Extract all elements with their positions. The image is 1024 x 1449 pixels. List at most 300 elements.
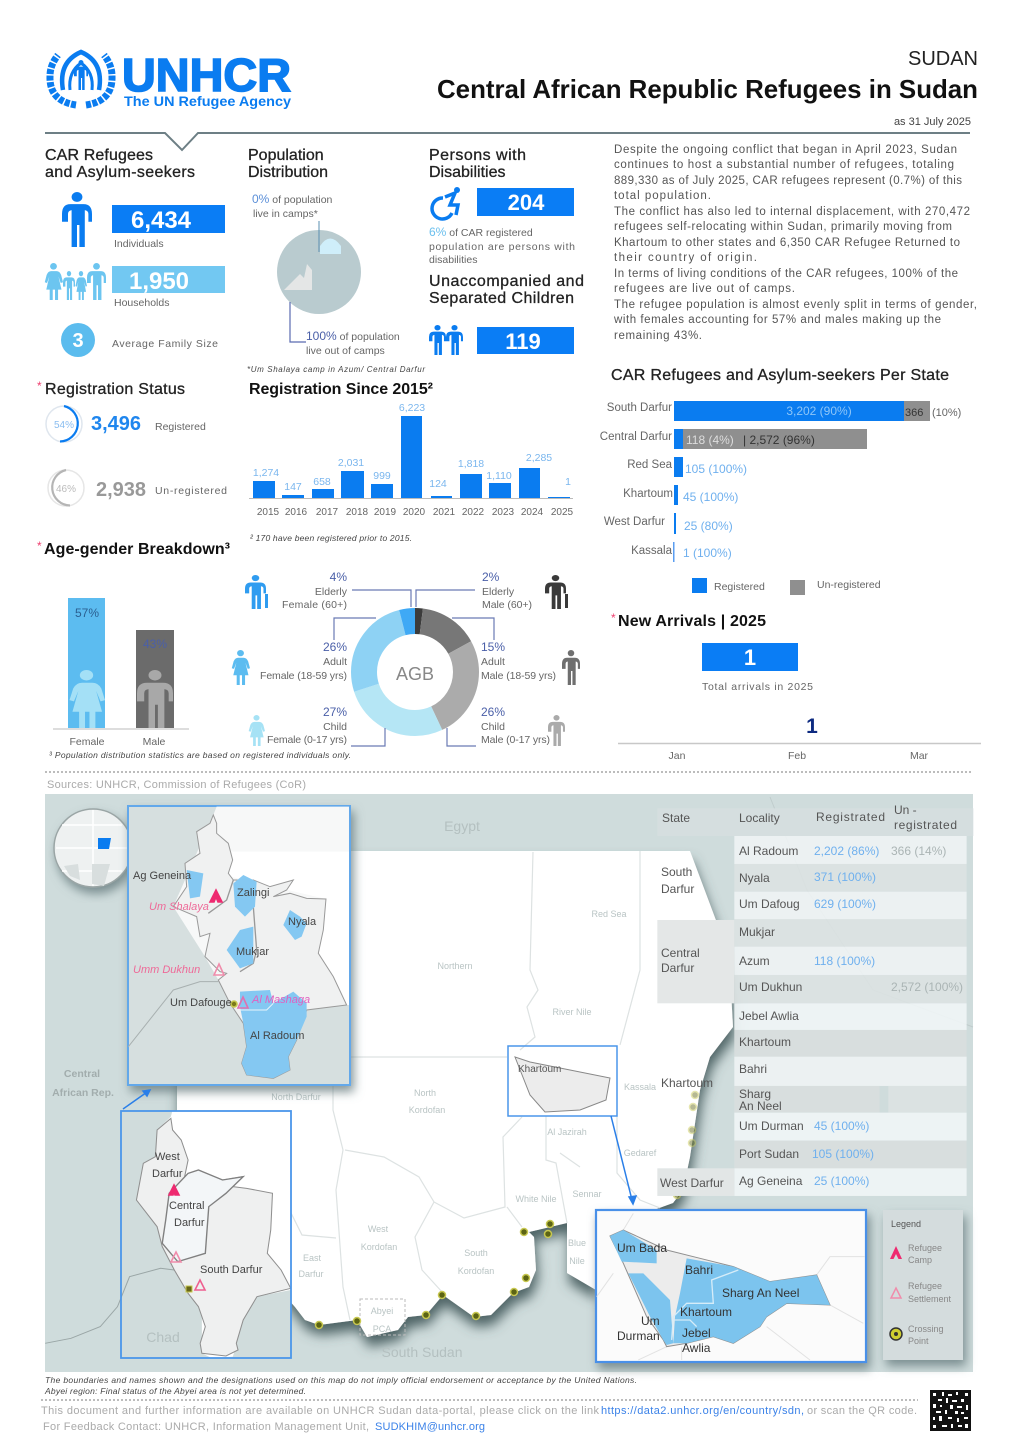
table header <box>662 803 957 832</box>
labels: female: 4% <box>330 570 347 584</box>
arrow: to Darfur inset <box>123 1090 150 1109</box>
state labels <box>600 402 673 557</box>
unregistered column: 2,572 (100%) <box>891 980 963 994</box>
table rows <box>657 808 973 1196</box>
bar values: 1,274 <box>253 467 279 479</box>
legend: refugee camp: Camp <box>908 1255 932 1265</box>
bar values: 25 (80%) <box>684 519 733 533</box>
labels: Central <box>169 1200 204 1212</box>
labels: female: Female (18-59 yrs) <box>260 670 347 682</box>
bars <box>253 416 570 498</box>
map panel <box>45 794 973 1372</box>
sources: Sources: UNHCR, Commission of Refugees (CoR) <box>47 779 306 791</box>
heading: New Arrivals | 2025 <box>618 613 766 630</box>
labels: Sharg An Neel <box>722 1286 799 1300</box>
neighbouring country label: African Rep. <box>52 1087 114 1099</box>
panel: age-gender breakdown <box>37 539 580 760</box>
bar values: 1 <box>565 476 571 488</box>
frame <box>121 1111 291 1358</box>
monthly chart <box>618 715 981 762</box>
country and state labels: North Darfur <box>271 1092 321 1102</box>
total label: Total arrivals in 2025 <box>702 681 813 693</box>
bar values: 1,110 <box>486 470 512 482</box>
legend: refugee settlement <box>891 1281 952 1304</box>
country and state labels: Egypt <box>444 818 480 834</box>
bar values: 118 (4%) <box>686 433 734 447</box>
bar values: | 2,572 (96%) <box>743 433 815 447</box>
labels: female: Female (60+) <box>282 599 347 611</box>
total arrivals stat: 1 <box>744 645 756 670</box>
year axis: 2024 <box>521 507 544 518</box>
year axis: 2015 <box>257 507 280 518</box>
stacked bars <box>673 401 930 562</box>
country and state labels: Sennar <box>572 1189 602 1199</box>
stat: 204 <box>477 188 574 216</box>
panel: registration status <box>37 379 227 506</box>
monthly chart: Jan <box>669 750 686 762</box>
panel: new arrivals <box>611 611 981 762</box>
text block: summary: Despite the ongoing conflict that began in April 2023, Sudan <box>614 144 957 156</box>
country and state labels: South <box>464 1248 488 1258</box>
map disclaimer: The boundaries and names shown and the designations used on this map do not imply official endorsement or acceptance by the United Nations. <box>45 1375 637 1385</box>
state labels: South Darfur <box>607 402 672 414</box>
year axis: 2019 <box>374 507 397 518</box>
out of camps label: of population <box>337 331 400 343</box>
registered column: 105 (100%) <box>812 1147 874 1161</box>
year axis: 2025 <box>551 507 574 518</box>
bar: male <box>136 630 174 728</box>
labels: female <box>260 570 348 746</box>
registered column: 2,202 (86%) <box>814 844 879 858</box>
text block: summary: remaining 43%. <box>614 330 702 342</box>
bar values: 366 <box>905 407 923 419</box>
monthly chart: Feb <box>788 750 806 762</box>
labels: Um <box>641 1314 660 1328</box>
locality column: Um Dafoug <box>739 897 800 911</box>
stat: 119: 119 <box>505 329 541 354</box>
heading: * <box>37 379 42 393</box>
text block: summary: continues to host a substantial number of refugees, totaling <box>614 159 954 171</box>
unregistered count: 2,938 <box>96 479 146 501</box>
heading: and Asylum-seekers <box>45 164 195 181</box>
bar values: (10%) <box>932 407 961 419</box>
labels: Durman <box>617 1329 660 1343</box>
labels: female: 26% <box>323 640 347 654</box>
country and state labels: Kassala <box>624 1082 656 1092</box>
state column: South <box>661 865 692 879</box>
text block: summary: The refugee population is almost evenly split in terms of gender, <box>614 299 977 311</box>
year axis: 2020 <box>403 507 426 518</box>
legend: Un-registered <box>817 579 881 591</box>
state labels: Kassala <box>631 545 673 557</box>
labels: male <box>481 570 556 746</box>
logo wordmark: UNHCR <box>122 49 291 101</box>
QR code <box>930 1390 971 1431</box>
individuals stat <box>112 205 225 250</box>
year axis: 2023 <box>492 507 515 518</box>
disabilities text: disabilities <box>429 254 477 266</box>
state labels: Red Sea <box>627 459 673 471</box>
Abyei PCA box <box>360 1299 405 1335</box>
labels: male: Elderly <box>482 586 515 598</box>
state labels: West Darfur <box>604 516 665 528</box>
legend: crossing point: Point <box>908 1336 929 1346</box>
unregistered percent: 46% <box>56 484 76 495</box>
inset shapes <box>128 807 349 1078</box>
disabilities text: population are persons with <box>429 241 575 253</box>
footnote: *Um Shalaya camp in Azum/ Central Darfur <box>247 365 425 374</box>
donut centre label: AGB <box>396 664 434 684</box>
text block: summary: 889,330 as of July 2025, CAR refugees represent (0.7%) of this <box>614 175 962 187</box>
bar values: 147 <box>284 481 302 493</box>
state labels: Khartoum <box>623 488 673 500</box>
table header: State <box>662 811 690 825</box>
households stat: 1,950 <box>129 268 189 295</box>
text block: summary: refugees are live out of camps. <box>614 283 795 295</box>
camp and settlement markers <box>210 890 248 1008</box>
logo: UNHCR <box>50 49 291 109</box>
registered column: 25 (100%) <box>814 1174 869 1188</box>
inset labels: Al Radoum <box>250 1030 304 1042</box>
stat: 119 <box>477 327 574 354</box>
bar values: 999 <box>373 470 391 482</box>
text block: summary: with females accounting for 57% and males making up the <box>613 314 941 326</box>
individuals stat: Individuals <box>114 238 164 250</box>
locality column: Sharg <box>739 1087 771 1101</box>
labels: male: 26% <box>481 705 505 719</box>
country and state labels: Kordofan <box>361 1242 397 1252</box>
state column: Darfur <box>661 882 694 896</box>
inset locator: Khartoum: Khartoum <box>518 1064 561 1075</box>
country and state labels: West <box>368 1224 389 1234</box>
bar values: 1 (100%) <box>683 546 732 560</box>
labels: Awlia <box>682 1341 711 1355</box>
year axis: 2022 <box>462 507 485 518</box>
panel: refugees per state <box>600 367 961 595</box>
icon: wheelchair <box>432 187 460 219</box>
locality column: Khartoum <box>739 1035 791 1049</box>
labels: female: Child <box>323 721 347 733</box>
panel: population distribution <box>247 147 425 374</box>
bar: female <box>68 598 105 728</box>
footer text: For Feedback Contact: UNHCR, Information Management Unit, <box>43 1421 369 1433</box>
labels: male: 15% <box>481 640 505 654</box>
heading: Disabilities <box>429 164 505 181</box>
inset map: Darfur states <box>45 1110 291 1358</box>
bar: female: 57% <box>75 606 99 620</box>
country and state labels: Al Jazirah <box>547 1127 587 1137</box>
country and state labels: South Sudan <box>382 1344 462 1360</box>
monthly chart: 1 <box>806 715 818 738</box>
header rule with notch <box>45 133 970 150</box>
bar values: 124 <box>429 478 447 490</box>
labels: Bahri <box>685 1263 713 1277</box>
Sudan territory <box>177 851 733 1337</box>
registered percent: 54% <box>54 420 74 431</box>
state column: Khartoum <box>661 1076 713 1090</box>
text block: summary: Khartoum to other states and 6,350 CAR Refugee Returned to <box>614 237 960 249</box>
labels: female: Female (0-17 yrs) <box>267 734 347 746</box>
locality column: Mukjar <box>739 925 775 939</box>
registered ring <box>46 406 82 442</box>
bar values: 658 <box>313 476 331 488</box>
panel: CAR refugees and asylum-seekers <box>45 147 225 357</box>
labels: Darfur <box>152 1168 183 1180</box>
locality column: Azum <box>739 954 770 968</box>
heading: unaccompanied: Separated Children <box>429 290 574 307</box>
footer text: SUDKHIM@unhcr.org <box>375 1421 485 1433</box>
legend: crossing point: Crossing <box>908 1324 944 1334</box>
legend: refugee camp: Refugee <box>908 1243 942 1253</box>
in camps label: live in camps* <box>253 208 318 220</box>
footer text <box>41 1405 917 1433</box>
map legend <box>883 1210 963 1360</box>
country and state labels: North <box>414 1088 436 1098</box>
year axis: 2017 <box>316 507 339 518</box>
labels: male: Child <box>481 721 505 733</box>
footnote: ³ Population distribution statistics are based on registered individuals only. <box>49 750 351 760</box>
locality column: Nyala <box>739 871 770 885</box>
inset frame <box>128 806 350 1085</box>
inset labels: Um Dafouge <box>170 997 232 1009</box>
bar values <box>683 404 961 560</box>
bar values: 6,223 <box>399 402 425 414</box>
heading: Distribution <box>248 164 328 181</box>
table header: Un - <box>894 803 917 817</box>
registered column <box>812 844 879 1188</box>
heading: * <box>37 539 42 553</box>
text block: summary: In terms of living conditions of the CAR refugees, 100% of the <box>614 268 958 280</box>
country and state labels: East <box>303 1253 322 1263</box>
heading: Registration Since 2015² <box>249 381 433 398</box>
icon: children <box>429 325 463 355</box>
country name: SUDAN <box>908 48 978 70</box>
labels: male: 2% <box>482 570 500 584</box>
map disclaimer: Abyei region: Final status of the Abyei area is not yet determined. <box>44 1386 306 1396</box>
labels: Jebel <box>682 1326 711 1340</box>
country and state labels: Kordofan <box>458 1266 494 1276</box>
year axis: 2018 <box>346 507 369 518</box>
bar values <box>253 402 571 493</box>
state column: West Darfur <box>660 1176 724 1190</box>
labels: female: 27% <box>323 705 347 719</box>
panel: persons with disabilities <box>429 147 584 355</box>
footer text: or scan the QR code. <box>807 1405 917 1417</box>
frame <box>596 1210 866 1362</box>
footer text: This document and further information are available on UNHCR Sudan data-portal, please click on the link <box>41 1405 600 1417</box>
inset labels: Umm Dukhun <box>133 964 200 976</box>
icon: mountains <box>284 264 312 290</box>
state labels: Central Darfur <box>600 431 672 443</box>
country and state labels: Blue <box>568 1238 586 1248</box>
unregistered column <box>891 844 963 994</box>
state column <box>660 865 724 1190</box>
text block: summary: total population. <box>614 190 711 202</box>
labels: male: Male (60+) <box>482 599 532 611</box>
title block <box>437 48 978 128</box>
locality column: Bahri <box>739 1062 767 1076</box>
heading: Registration Status <box>45 381 185 398</box>
labels: male: Male (18-59 yrs) <box>481 670 556 682</box>
bar values: 2,285 <box>526 452 552 464</box>
country and state labels: Nile <box>569 1256 585 1266</box>
locality column <box>739 844 804 1188</box>
inset labels: Nyala <box>288 916 317 928</box>
labels: female: Adult <box>323 656 347 668</box>
labels: West <box>155 1151 180 1163</box>
country and state labels: Abyei <box>371 1306 393 1316</box>
heading: Population <box>248 147 324 164</box>
bar values: 2,031 <box>338 457 364 469</box>
inset labels: Mukjar <box>236 946 269 958</box>
arrow: to Khartoum inset <box>611 1116 636 1204</box>
labels: Darfur <box>174 1217 205 1229</box>
footer text: https://data2.unhcr.org/en/country/sdn, <box>601 1405 804 1417</box>
locality column: Al Radoum <box>739 844 798 858</box>
inset map: Khartoum localities <box>596 1210 866 1362</box>
unregistered ring <box>48 470 84 506</box>
legend <box>692 578 881 595</box>
locality column: Ag Geneina <box>739 1174 803 1188</box>
labels: Um Bada <box>617 1241 667 1255</box>
bar labels: Male <box>143 736 166 748</box>
heading: unaccompanied: Unaccompanied and <box>429 273 584 290</box>
legend: refugee camp <box>890 1243 942 1265</box>
registered column: 118 (100%) <box>814 954 875 968</box>
disabilities text: 6% <box>429 225 447 239</box>
labels: Khartoum <box>680 1305 732 1319</box>
logo tagline: The UN Refugee Agency <box>124 93 291 109</box>
connectors <box>334 590 494 746</box>
footnote: ² 170 have been registered prior to 2015. <box>250 533 412 543</box>
neighbouring country label: Central <box>64 1068 100 1080</box>
labels: male: Adult <box>481 656 505 668</box>
map background <box>45 794 973 1372</box>
icon: tent <box>320 238 341 254</box>
inset labels: Ag Geneina <box>133 870 192 882</box>
table header: Registrated <box>816 810 885 824</box>
pie chart <box>277 221 361 314</box>
bar chart: registration since 2015 <box>249 381 574 543</box>
locator globe <box>54 809 132 887</box>
locality column: Um Dukhun <box>739 980 802 994</box>
country and state labels: Northern <box>437 961 473 971</box>
country and state labels: PCA <box>373 1324 391 1334</box>
text block: summary: their country of origin. <box>614 252 757 264</box>
country and state labels: White Nile <box>515 1194 557 1204</box>
year axis: 2016 <box>285 507 308 518</box>
out of camps connector <box>290 302 306 342</box>
stat: 204: 204 <box>508 190 545 215</box>
heading: * <box>611 611 616 625</box>
inset labels: Al Mashaga <box>251 994 310 1006</box>
title: Central African Republic Refugees in Sudan <box>437 74 978 104</box>
average family size <box>61 323 218 357</box>
data table <box>657 803 973 1196</box>
registered column: 371 (100%) <box>814 870 876 884</box>
individuals stat: 6,434 <box>131 207 192 234</box>
total arrivals stat <box>702 643 798 671</box>
crossing points <box>316 1092 698 1328</box>
heading: Persons with <box>429 147 526 164</box>
registered column: 629 (100%) <box>814 897 876 911</box>
table header: registrated <box>894 818 957 832</box>
labels: male: Male (0-17 yrs) <box>481 734 550 746</box>
locality column: An Neel <box>739 1099 782 1113</box>
households stat <box>112 266 225 309</box>
country and state labels: Red Sea <box>591 909 627 919</box>
country and state labels <box>271 818 657 1360</box>
legend: crossing point <box>890 1324 944 1346</box>
heading: CAR Refugees <box>45 147 153 164</box>
text block: summary: The conflict has also led to internal displacement, with 270,472 <box>614 206 970 218</box>
icon: UNHCR emblem <box>50 52 112 105</box>
date: as 31 July 2025 <box>894 116 971 128</box>
bar values: 45 (100%) <box>683 490 738 504</box>
inset labels: Um Shalaya <box>149 901 209 913</box>
disabilities text: of CAR registered <box>446 227 533 239</box>
bar values: 3,202 (90%) <box>786 404 852 418</box>
inset map: Darfur localities <box>128 806 350 1085</box>
unregistered column: 366 (14%) <box>891 844 946 858</box>
heading: Age-gender Breakdown³ <box>44 541 230 558</box>
label: Chad: Chad <box>146 1329 180 1345</box>
registered column: 45 (100%) <box>814 1119 869 1133</box>
registered label: Registered <box>155 421 206 433</box>
registered count: 3,496 <box>91 413 141 435</box>
out of camps label: live out of camps <box>306 345 385 357</box>
locality column: Um Durman <box>739 1119 804 1133</box>
legend: refugee settlement: Refugee <box>908 1281 942 1291</box>
average family size: 3 <box>72 330 84 352</box>
labels: South Darfur <box>200 1264 263 1276</box>
bar values: 105 (100%) <box>685 462 747 476</box>
icons: age-gender figures <box>232 575 580 746</box>
heading: CAR Refugees and Asylum-seekers Per State <box>611 367 949 384</box>
locality column: Port Sudan <box>739 1147 799 1161</box>
icon: individual <box>62 192 92 247</box>
state boundaries <box>274 851 660 1320</box>
inset labels: Zalingi <box>237 887 269 899</box>
inset locator: Khartoum <box>508 1046 617 1116</box>
unregistered label: Un-registered <box>155 485 227 497</box>
legend title: Legend <box>891 1219 921 1229</box>
legend: refugee settlement: Settlement <box>908 1294 952 1304</box>
state column: Central <box>661 946 700 960</box>
country and state labels: Kordofan <box>409 1105 445 1115</box>
households stat: Households <box>114 297 169 309</box>
bar values: 1,818 <box>458 458 484 470</box>
Red Sea line <box>770 797 973 1027</box>
bar labels: Female <box>69 736 105 748</box>
inset labels <box>133 870 317 1042</box>
in camps label: 0% <box>252 192 270 206</box>
country and state labels: Darfur <box>298 1269 324 1279</box>
bar: male: 43% <box>143 637 167 651</box>
year axis <box>257 507 574 518</box>
out of camps label: 100% <box>306 329 337 343</box>
markers <box>169 1185 205 1292</box>
labels: female: Elderly <box>315 586 348 598</box>
country and state labels: Gedaref <box>624 1148 657 1158</box>
legend: Registered <box>714 581 765 593</box>
state column: Darfur <box>661 961 694 975</box>
text block: summary: refugees self-relocating within Sudan, primarily moving from <box>614 221 952 233</box>
year axis: 2021 <box>433 507 456 518</box>
monthly chart: Mar <box>910 750 929 762</box>
locality column: Jebel Awlia <box>739 1009 799 1023</box>
icon: family <box>45 263 106 300</box>
